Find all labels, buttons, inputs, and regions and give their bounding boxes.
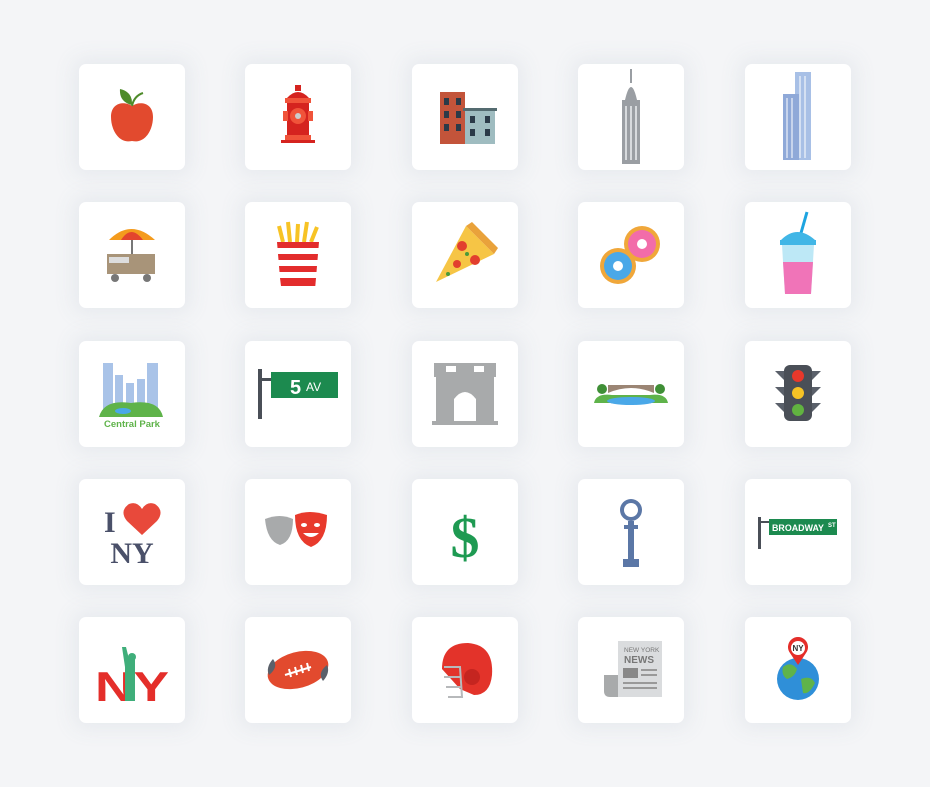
card: 5 AV sign [245,341,351,447]
card: donuts [578,202,684,308]
card: I love NY [79,479,185,585]
icon: cart [107,229,155,282]
card: chrysler building [578,64,684,170]
icon: broadway sign [758,517,837,549]
icon: I heart NY: NY [110,537,154,570]
card: fire hydrant [245,64,351,170]
icon: newspaper: NEW YORK [624,647,660,654]
card: football [245,617,351,723]
icon: globe with NY pin: NY [792,644,804,653]
icon: clock post [620,499,642,567]
icon: I heart NY [104,503,161,570]
card: pizza [412,202,518,308]
icon: traffic light [775,365,821,421]
icon: NY statue of liberty: NY [95,663,169,710]
icon: I heart NY: I [104,506,116,539]
card: hot dog cart [79,202,185,308]
card: drink [745,202,851,308]
icon: park: Central Park [104,419,161,430]
icon: masks [265,512,327,547]
icon: dollar sign: $ [450,505,480,570]
icon: pizza [436,222,498,282]
card: newspaper [578,617,684,723]
icon: gapstow bridge [594,384,668,405]
card: skyscraper [745,64,851,170]
card: traffic light [745,341,851,447]
card: bridge [578,341,684,447]
card: fries [245,202,351,308]
icon: fries [277,222,319,286]
card: brownstones [412,64,518,170]
icon: buildings [440,92,497,144]
card: globe pin [745,617,851,723]
icon: broadway sign: ST [828,523,836,529]
card: NY liberty [79,617,185,723]
icon: newspaper: NEWS [624,655,654,666]
card: street clock [578,479,684,585]
card: theater masks [245,479,351,585]
icon: football [263,645,333,695]
card: dollar [412,479,518,585]
icon: street sign [258,369,338,419]
card: arch [412,341,518,447]
icon: street sign: AV [306,380,321,394]
card: apple [79,64,185,170]
icon: washington arch [432,363,498,425]
card: broadway sign [745,479,851,585]
icon: football helmet [442,643,492,697]
icon: donuts [600,226,660,284]
icon: broadway sign: BROADWAY [772,523,824,533]
card: helmet [412,617,518,723]
icon: skyscraper [783,72,811,160]
icon: street sign: 5 [290,377,301,399]
icon: newspaper [604,641,662,697]
icon: drink cup [780,212,816,294]
icon: chrysler [622,69,640,164]
icon: hydrant [281,85,315,143]
icon: apple [111,89,153,141]
card: central park [79,341,185,447]
